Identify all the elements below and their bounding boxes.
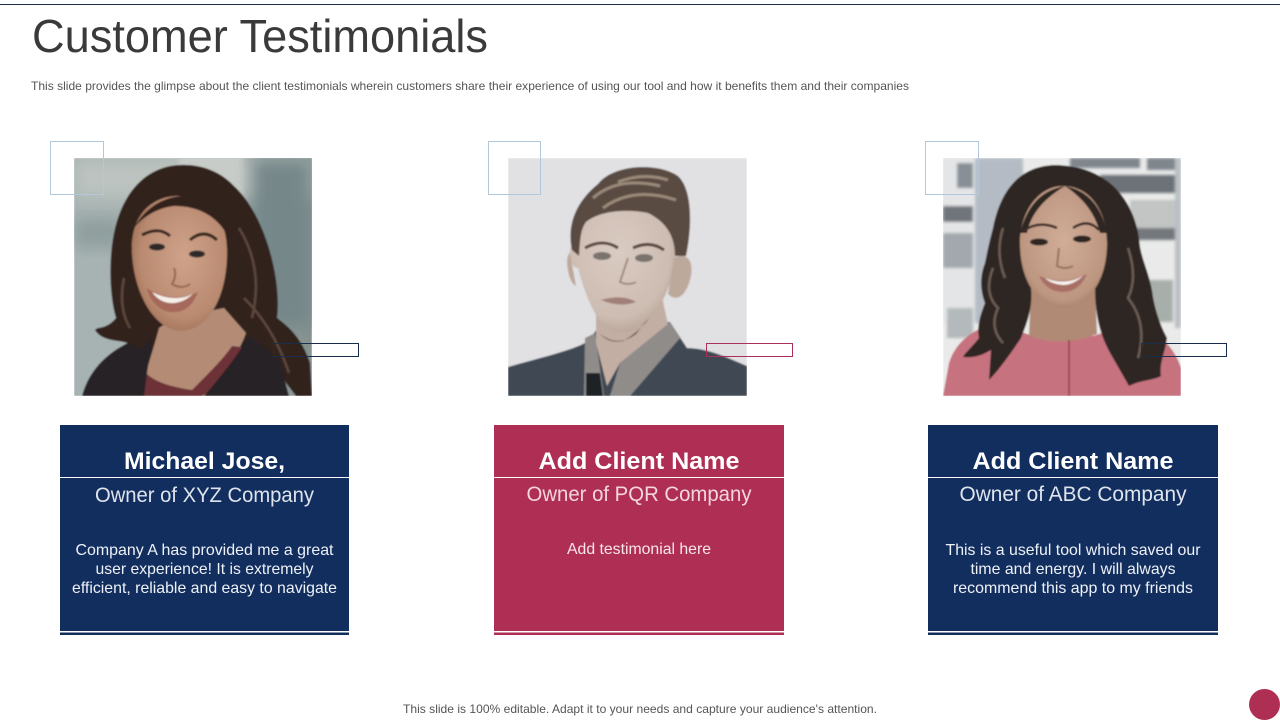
testimonial text <box>946 542 1201 597</box>
top rule <box>0 4 1280 5</box>
testimonial text: Add testimonial here <box>567 541 711 558</box>
name card <box>494 425 784 635</box>
decorative frame: bottom right <box>274 344 358 356</box>
name card <box>928 425 1218 635</box>
testimonial text: Company A has provided me a great <box>76 542 334 559</box>
decorative frame: bottom right <box>1142 344 1226 356</box>
panel: testimonial 1 <box>50 142 358 635</box>
client role: Owner of PQR Company <box>526 483 752 506</box>
title: Customer Testimonials <box>32 10 488 62</box>
name card <box>60 425 349 635</box>
page marker circle <box>1249 689 1280 720</box>
testimonial text: time and energy. I will always <box>970 561 1176 578</box>
panel: testimonial 3 <box>926 142 1226 635</box>
client name: Michael Jose, <box>124 448 285 475</box>
testimonial text <box>72 542 337 597</box>
subtitle: This slide provides the glimpse about the client testimonials wherein customers share their experience of using our tool and how it benefits them and their companies <box>31 79 909 93</box>
client name: Add Client Name <box>972 448 1174 475</box>
client role: Owner of ABC Company <box>960 483 1187 506</box>
decorative frame: top left <box>50 142 104 194</box>
decorative frame: bottom right <box>706 344 792 356</box>
testimonial text: This is a useful tool which saved our <box>946 542 1201 559</box>
portrait: client 3 <box>943 158 1181 396</box>
testimonial text: user experience! It is extremely <box>96 561 314 578</box>
client name: Add Client Name <box>538 448 740 475</box>
portrait: client 2 <box>508 158 747 396</box>
decorative frame: top left <box>488 142 540 194</box>
client role: Owner of XYZ Company <box>95 484 314 507</box>
testimonial text: efficient, reliable and easy to navigate <box>72 580 337 597</box>
portrait: Michael Jose <box>74 153 312 396</box>
decorative frame: top left <box>926 142 978 194</box>
panel: testimonial 2 <box>488 142 792 635</box>
footer note: This slide is 100% editable. Adapt it to your needs and capture your audience's attention. <box>403 702 877 716</box>
testimonial text: recommend this app to my friends <box>953 580 1193 597</box>
